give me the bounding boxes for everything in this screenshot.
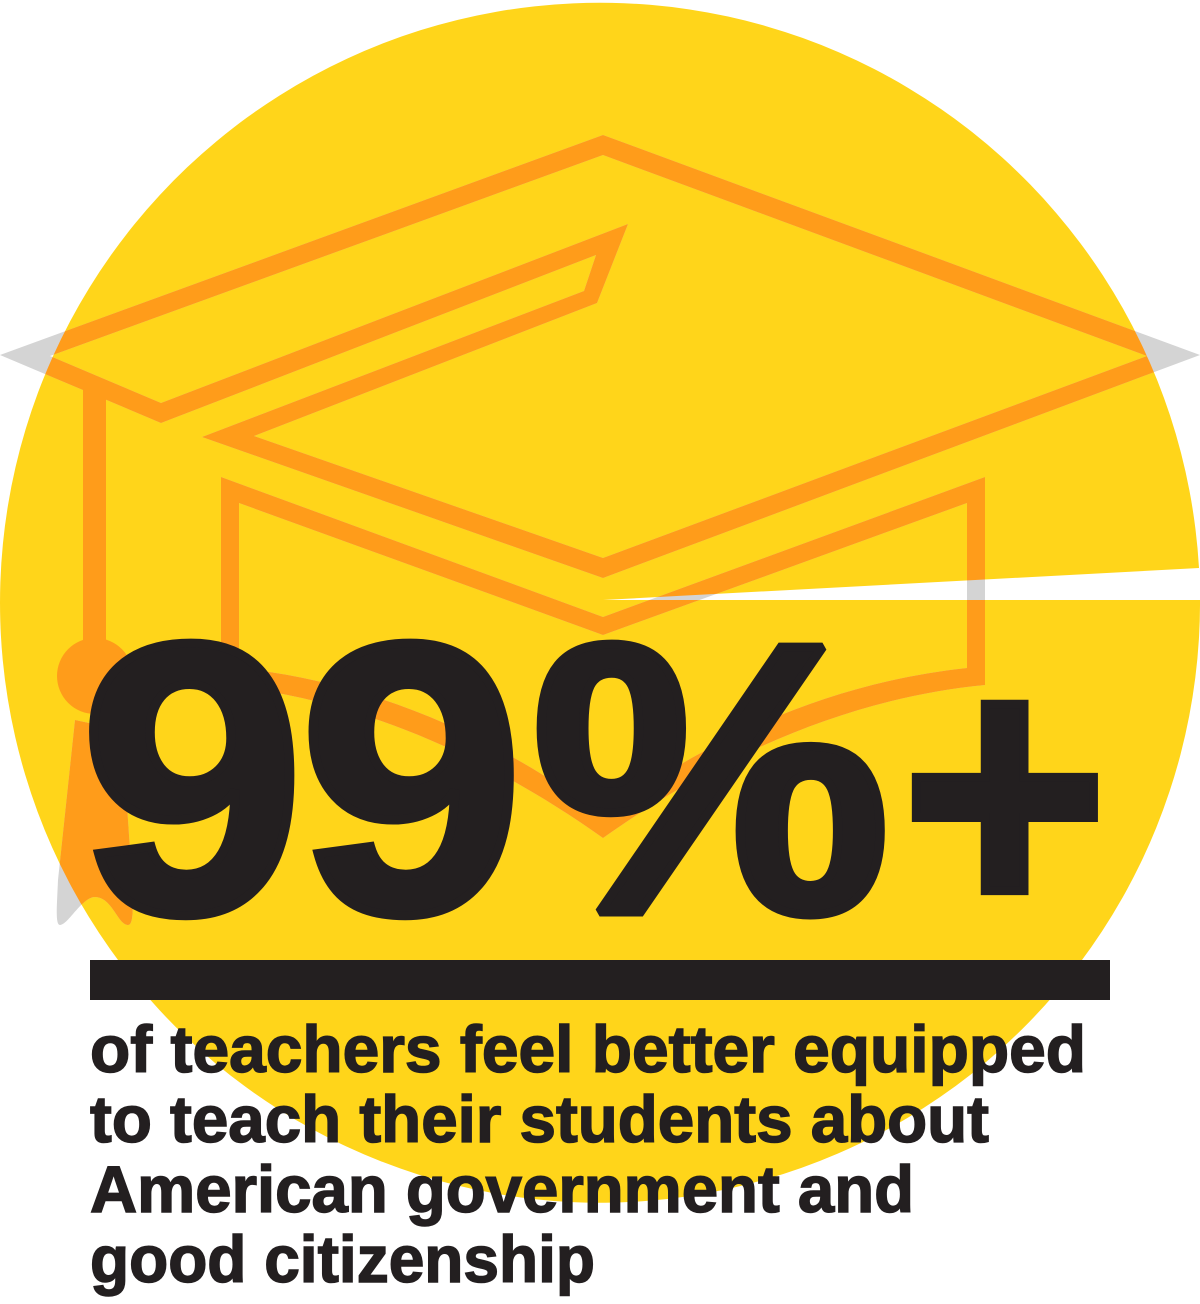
icon: graduation cap (grey outside circle) [0,135,1200,925]
big statistic [80,564,1108,998]
description text: of teachers feel better equipped [90,1012,1086,1086]
big statistic: + [901,589,1108,998]
divider bar [90,960,1110,1000]
big statistic: % [531,564,891,994]
icon: graduation cap (orange inside circle) [0,135,1200,925]
big statistic: 9 [299,564,524,994]
description text: American government and [90,1152,914,1226]
description text [90,1012,1086,1296]
description text: to teach their students about [90,1082,989,1156]
description text: good citizenship [90,1222,595,1296]
big statistic: 9 [80,564,305,994]
